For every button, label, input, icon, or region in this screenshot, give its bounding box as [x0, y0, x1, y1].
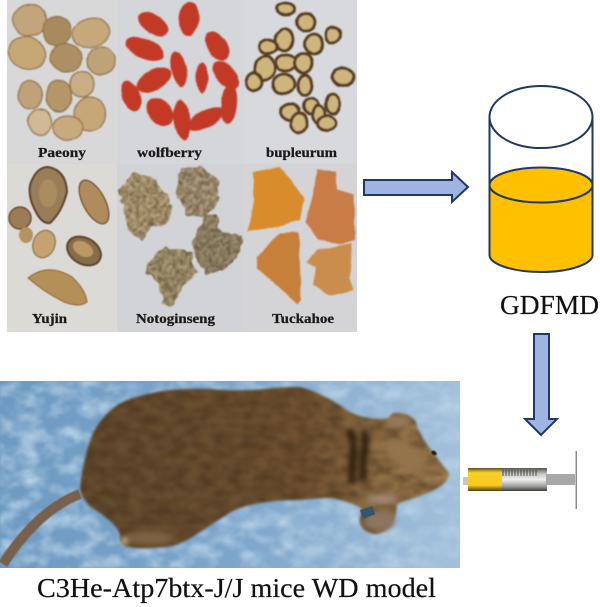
- icon: syringe: [463, 451, 577, 509]
- herb: paeony slices: [4, 4, 115, 140]
- label: GDFMD: GDFMD: [500, 290, 599, 320]
- herb: tuckahoe pieces: [248, 167, 355, 304]
- herb: wolfberry pieces: [117, 1, 244, 141]
- label: Paeony: Paeony: [38, 146, 86, 161]
- label: Tuckahoe: Tuckahoe: [272, 312, 334, 327]
- arrow: herbs to GDFMD: [364, 172, 468, 202]
- label: Yujin: Yujin: [32, 312, 67, 327]
- panel: herb photographs: [4, 0, 357, 332]
- icon: beaker with liquid: [490, 86, 592, 272]
- mouse: ear tag: [360, 506, 375, 519]
- arrow: GDFMD to syringe: [525, 334, 557, 435]
- label: mouse model caption: C3He-Atp7btx-J/J mice WD model: [37, 573, 436, 603]
- herb: notoginseng roots: [119, 166, 243, 306]
- label: bupleurum: bupleurum: [266, 146, 337, 161]
- mouse: fur shading: [120, 417, 432, 546]
- mouse: body: [80, 387, 449, 548]
- herb: bupleurum slices: [246, 4, 354, 133]
- panel: mouse photograph: [0, 381, 460, 568]
- mouse: tail: [3, 494, 80, 564]
- label: wolfberry: wolfberry: [137, 146, 202, 161]
- label: Notoginseng: Notoginseng: [136, 312, 215, 327]
- herb: yujin slices: [9, 167, 115, 305]
- mouse: eye: [430, 450, 438, 456]
